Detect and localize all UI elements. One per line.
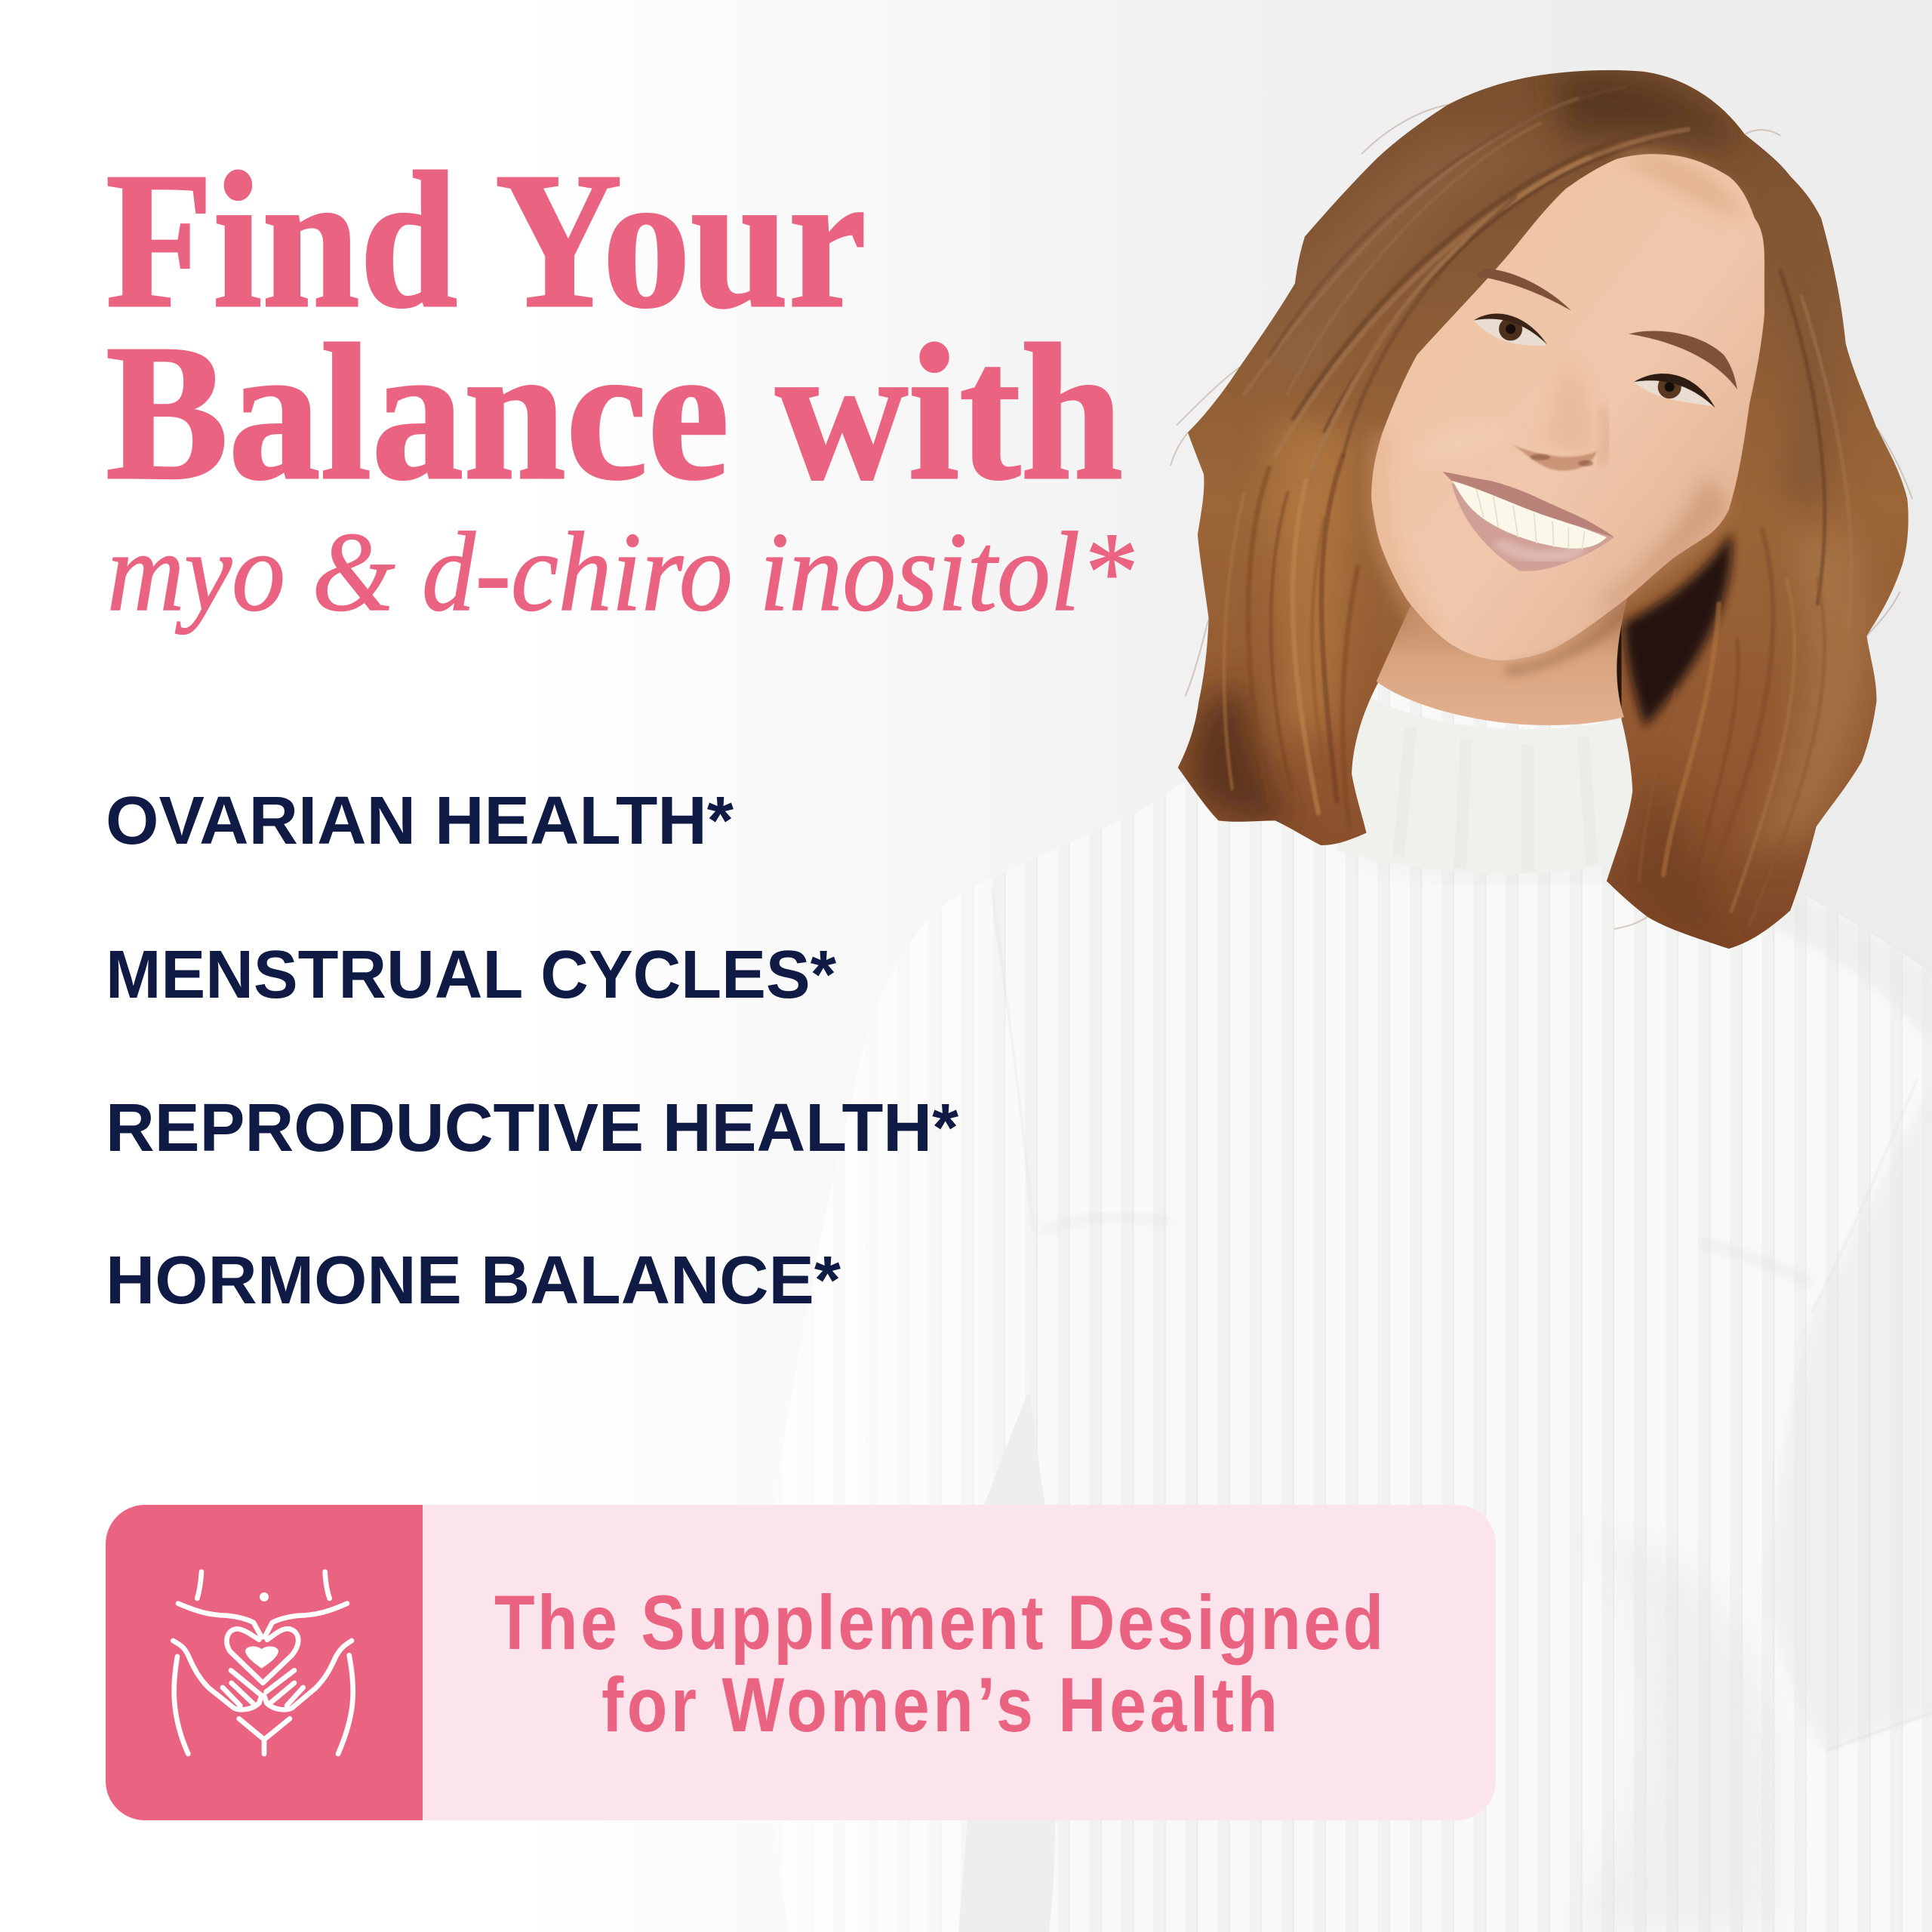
arm fade	[770, 881, 1034, 1932]
benefits list: HORMONE BALANCE*	[106, 1243, 841, 1318]
headline: Find Your	[106, 132, 866, 348]
hair tone blobs	[1186, 72, 1869, 943]
benefits list: MENSTRUAL CYCLES*	[106, 937, 836, 1013]
subheading: myo & d-chiro inositol*	[107, 509, 1134, 635]
teeth	[1451, 478, 1607, 549]
callout text: for Women’s Health	[601, 1663, 1278, 1749]
headline	[106, 132, 1123, 520]
benefits list: REPRODUCTIVE HEALTH*	[106, 1091, 958, 1166]
eyes	[1474, 313, 1715, 408]
hair	[1158, 49, 1922, 961]
mouth	[1443, 472, 1614, 571]
neck	[1377, 592, 1629, 725]
lower lip	[1451, 483, 1614, 571]
panel background	[106, 1505, 1496, 1820]
dark hair behind neck	[1601, 530, 1725, 718]
face shading	[1378, 153, 1749, 672]
eyebrows	[1476, 269, 1571, 310]
sweater shading	[992, 851, 1932, 1751]
benefits list	[106, 783, 958, 1318]
icon panel	[106, 1505, 423, 1820]
callout text: The Supplement Designed	[494, 1580, 1383, 1666]
hair strands	[1224, 86, 1851, 924]
headline: Balance with	[106, 304, 1123, 520]
panel: supplement callout	[106, 1505, 1496, 1820]
flyaway wisps	[1171, 105, 1912, 929]
face	[1371, 154, 1764, 660]
upper lip	[1443, 472, 1614, 537]
nose	[1512, 407, 1607, 471]
collar ribs	[1398, 727, 1592, 872]
icon: hands forming heart on abdomen	[173, 1572, 353, 1754]
sweater	[770, 684, 1932, 1932]
right sleeve tone	[1766, 1084, 1932, 1751]
photo: smiling woman in white sweater	[993, 70, 1922, 1932]
lower torso tone	[1564, 1527, 1780, 1932]
arm gap	[958, 1392, 1056, 1932]
collar	[1337, 690, 1651, 874]
callout text	[494, 1580, 1383, 1749]
benefits list: OVARIAN HEALTH*	[106, 783, 734, 859]
